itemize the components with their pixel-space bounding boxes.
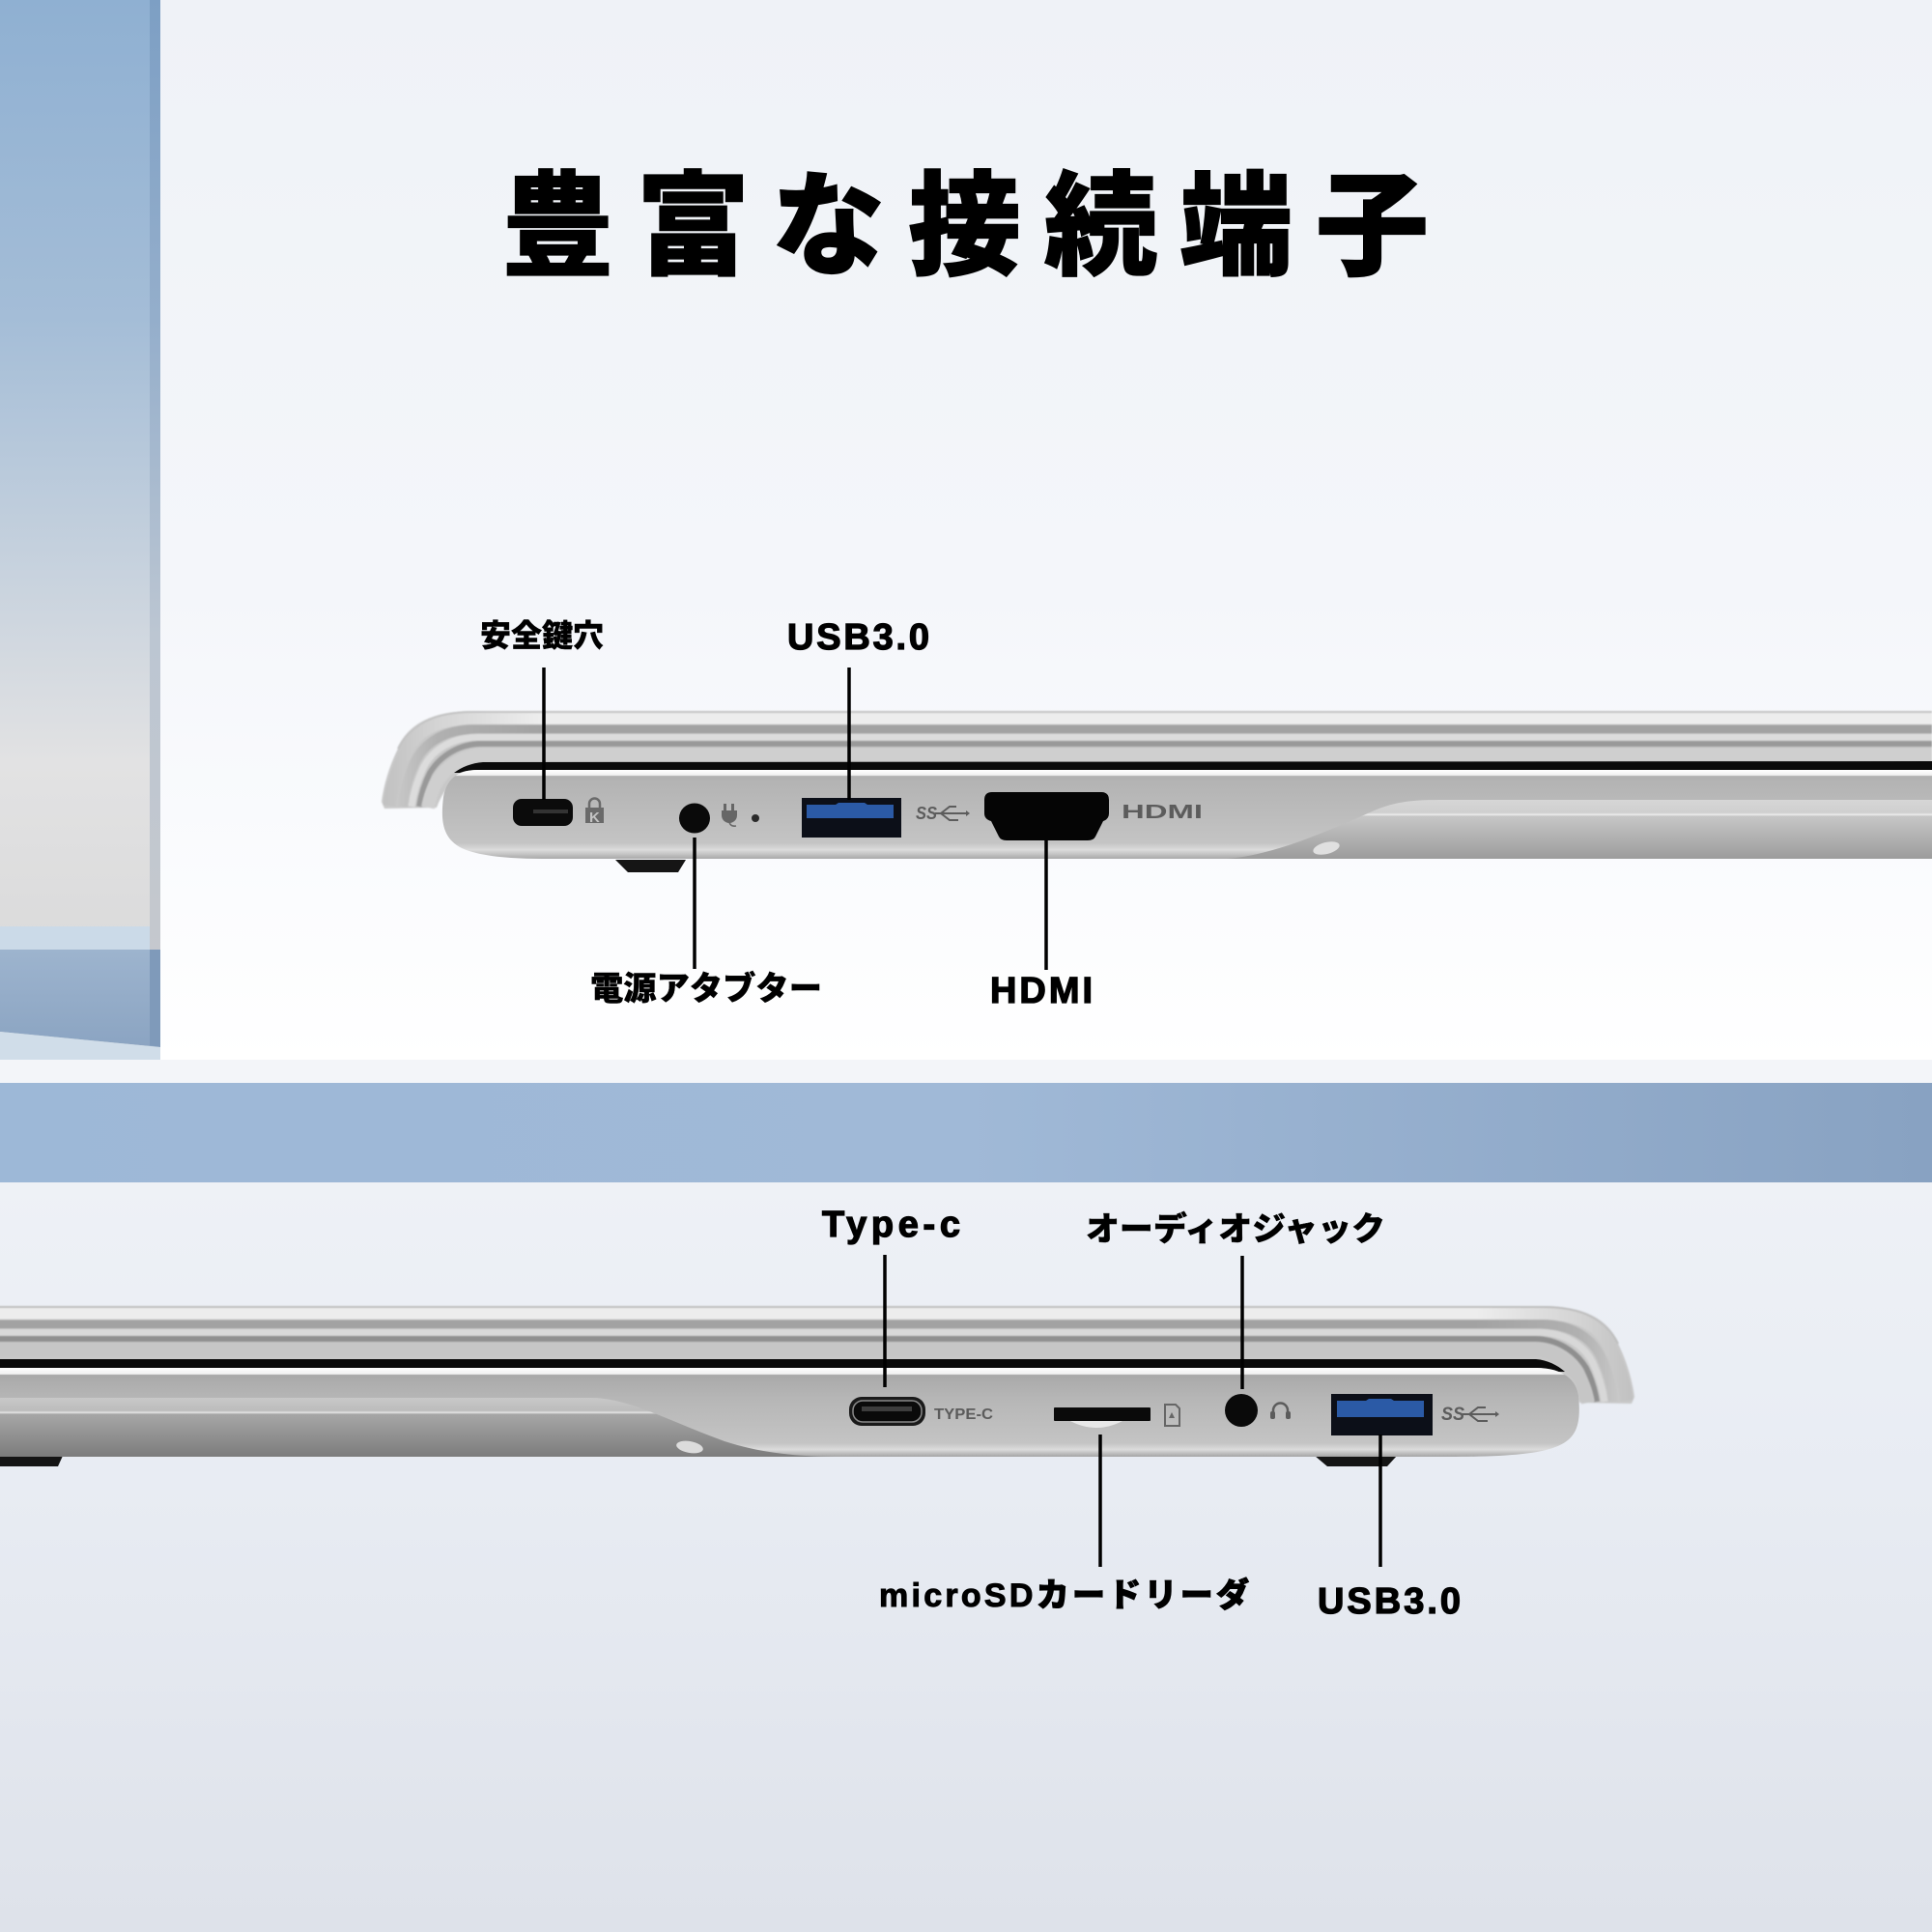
base body: [0, 1368, 1579, 1457]
icon: lock: [585, 799, 604, 826]
label: security lock: 安全鍵穴: [480, 618, 604, 653]
label: USB3.0 top: USB3.0: [787, 617, 929, 658]
base crease: [1227, 800, 1932, 859]
label: microSD reader: microSDカードリーダ: [879, 1577, 1249, 1614]
icon: headphones: [1270, 1403, 1291, 1419]
vent bump: [675, 1439, 704, 1455]
port: power jack: [679, 804, 710, 833]
background: separator band: [0, 1060, 1932, 1182]
label: audio jack: オーディオジャック: [1086, 1210, 1385, 1248]
hinge gap: [454, 761, 1932, 773]
port: USB 3.0: [802, 798, 901, 838]
label: USB3.0 bottom: USB3.0: [1318, 1581, 1461, 1622]
lid: [0, 1306, 1634, 1404]
icon: SuperSpeed USB mark: SS: [1441, 1405, 1464, 1425]
leader lines: [544, 668, 1380, 1567]
label: HDMI: HDMI: [990, 971, 1093, 1011]
icon: SuperSpeed USB mark: SS: [916, 804, 937, 823]
background: lower panel: [0, 1182, 1932, 1932]
HDMI engraved label: HDMI: [1122, 802, 1203, 823]
port: security lock slot: [513, 799, 573, 826]
left blue strip: [0, 0, 160, 1060]
icon: SuperSpeed USB mark: [916, 804, 970, 823]
port: audio jack: [1225, 1394, 1258, 1427]
icon: lock: K: [589, 810, 600, 826]
laptop: right side view: [0, 1306, 1634, 1466]
base crease: [0, 1398, 840, 1457]
port: microSD slot: [1054, 1407, 1151, 1428]
vent bump: [1312, 839, 1341, 857]
base body: [442, 770, 1932, 859]
port: USB 3.0: [1331, 1394, 1433, 1435]
hinge gap: [0, 1359, 1565, 1372]
label: power adapter: 電源アタブター: [590, 970, 822, 1008]
laptop foot right: [1315, 1456, 1397, 1466]
lid: [382, 711, 1932, 809]
laptop foot left: [0, 1456, 63, 1466]
icon: power plug: [722, 804, 737, 826]
TYPE-C engraved label: TYPE-C: [934, 1406, 993, 1423]
icon: SD card: [1165, 1405, 1179, 1426]
icon: SuperSpeed USB mark: [1441, 1405, 1499, 1425]
title: 豊富な接続端子: [501, 163, 1429, 290]
laptop foot: [615, 860, 686, 872]
laptop: left side view: [382, 711, 1932, 872]
port: USB Type-C: [849, 1397, 925, 1426]
label: Type-c: Type-c: [822, 1205, 960, 1245]
port: HDMI: [984, 792, 1109, 840]
indicator light: [752, 814, 759, 822]
background: upper panel: [0, 0, 1932, 1061]
